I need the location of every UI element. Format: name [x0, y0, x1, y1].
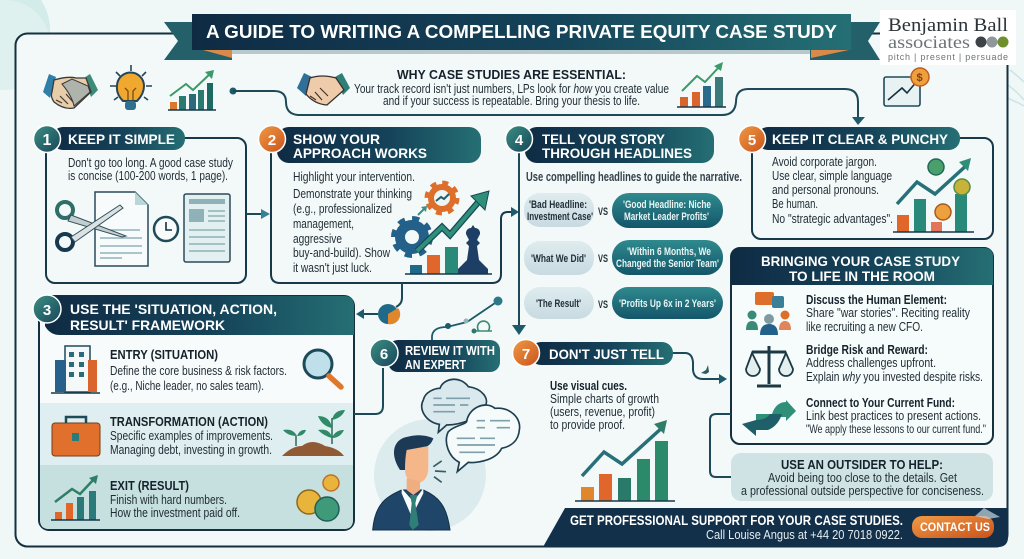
text block	[68, 155, 233, 183]
text block	[550, 378, 659, 432]
intro text: Use compelling headlines to guide the narrative.	[526, 169, 742, 184]
text block: management,	[293, 216, 354, 231]
headline comparison row 1: VS	[598, 206, 608, 218]
callout: use an outsider to help: USE AN OUTSIDER TO HELP:	[781, 457, 943, 472]
footer: call to action	[543, 508, 1008, 547]
headline comparison row 2	[524, 240, 723, 275]
number badge: 7	[522, 346, 530, 363]
footer text	[570, 512, 903, 542]
text block: Demonstrate your thinking	[293, 186, 412, 201]
heading pill	[52, 127, 185, 150]
headline comparison row 3: 'Profits Up 6x in 2 Years'	[619, 298, 716, 310]
title text: A GUIDE TO WRITING A COMPELLING PRIVATE EQUITY CASE STUDY	[206, 22, 837, 42]
headline comparison row 2: 'What We Did'	[531, 253, 586, 265]
panel 7: don't just tell	[512, 340, 727, 501]
heading: USE THE 'SITUATION, ACTION,	[70, 301, 277, 317]
title banner	[164, 14, 880, 60]
panel: bringing your case study to life in the room	[731, 248, 993, 444]
icon: scissors	[57, 202, 126, 250]
text block: buy-and-build). Show	[293, 245, 390, 260]
number badge	[512, 340, 540, 366]
row: entry: Define the core business & risk factors.	[110, 363, 287, 378]
heading pill	[530, 342, 673, 365]
headline comparison row 1: Investment Case'	[527, 211, 593, 223]
number badge: 3	[43, 302, 51, 319]
text block: and personal pronouns.	[772, 182, 879, 197]
item: connect to fund	[742, 395, 986, 436]
text block: aggressive	[293, 231, 342, 246]
row: transformation: Specific examples of improvements.	[110, 428, 273, 443]
headline comparison row 2: VS	[598, 253, 608, 265]
heading pill: TELL YOUR STORY	[542, 131, 666, 147]
heading pill: AN EXPERT	[405, 357, 466, 372]
item: connect to fund: Connect to Your Current Fund:	[806, 395, 955, 410]
icon: gears and growth	[394, 183, 492, 274]
panel 3: situation action result framework	[33, 295, 354, 530]
heading pill	[525, 127, 714, 163]
icon: chart	[677, 62, 726, 107]
text block: (users, revenue, profit)	[550, 404, 655, 419]
number badge	[738, 126, 766, 152]
headline comparison row 3: 'The Result'	[536, 298, 581, 310]
panel 6: review it with an expert	[370, 339, 520, 531]
text block: Simple charts of growth	[550, 391, 659, 406]
heading pill: KEEP IT SIMPLE	[68, 131, 175, 147]
section: why case studies are essential	[297, 62, 726, 108]
headline comparison row 3	[524, 287, 723, 319]
number badge: 5	[748, 132, 756, 149]
heading pill: KEEP IT CLEAR & PUNCHY	[772, 131, 949, 147]
logo: associates	[888, 32, 970, 52]
text block: to provide proof.	[550, 417, 625, 432]
icon: document	[95, 192, 148, 266]
text block: Highlight your intervention.	[293, 169, 415, 184]
number badge: 4	[515, 132, 524, 149]
heading: WHY CASE STUDIES ARE ESSENTIAL:	[397, 67, 626, 82]
item: risk and reward: Explain why you invested despite risks.	[806, 369, 983, 384]
number badge: 1	[43, 132, 52, 149]
arrow: step 1 to 2	[246, 209, 270, 219]
connector: step 2 to 3	[356, 283, 402, 324]
chart: growth bars	[575, 420, 675, 501]
connector: step 6 to panel 3	[354, 368, 383, 414]
panel 1: keep it simple	[34, 126, 246, 283]
number badge: 2	[268, 132, 276, 149]
row: exit: Finish with hard numbers.	[110, 492, 227, 507]
icon: handshake small	[297, 73, 350, 105]
row: exit: EXIT (RESULT)	[110, 478, 189, 493]
number badge	[506, 126, 532, 152]
text block: Your track record isn't just numbers, LPs look for how you create value	[354, 81, 669, 96]
headline comparison row 2: Changed the Senior Team'	[616, 258, 719, 270]
footer text: Call Louise Angus at +44 20 7018 0922.	[706, 527, 903, 542]
text block: Use clear, simple language	[772, 168, 892, 183]
text block: Use visual cues.	[550, 378, 627, 393]
number badge	[370, 339, 398, 367]
logo: pitch | present | persuade	[888, 52, 1008, 62]
number badge	[33, 295, 61, 323]
icon: chart with coins	[893, 158, 974, 232]
heading: BRINGING YOUR CASE STUDY	[761, 253, 961, 269]
item: human element: like recruiting a new CFO.	[806, 319, 923, 334]
headline comparison row 2: 'Within 6 Months, We	[627, 246, 711, 258]
footer text: GET PROFESSIONAL SUPPORT FOR YOUR CASE STUDIES.	[570, 512, 903, 528]
heading	[731, 248, 993, 285]
connector: step 6 path	[432, 296, 502, 340]
text line two: and if your success is repeatable. Bring your thesis to life.	[383, 93, 640, 108]
row: transformation: Managing debt, investing in growth.	[110, 442, 272, 457]
logo	[880, 10, 1016, 65]
icon: expert with speech bubbles	[373, 379, 520, 531]
text block: Avoid corporate jargon.	[772, 154, 877, 169]
icon: handshake	[43, 74, 98, 108]
heading pill: REVIEW IT WITH	[405, 343, 495, 358]
text block: is concise (100-200 words, 1 page).	[68, 168, 228, 183]
icon: document with coin: $	[916, 72, 923, 84]
callout: use an outsider to help	[731, 453, 993, 501]
item: risk and reward: Address challenges upfront.	[806, 355, 936, 370]
heading pill: APPROACH WORKS	[293, 145, 427, 161]
contact button: CONTACT US	[920, 520, 990, 534]
item: risk and reward: Bridge Risk and Reward:	[806, 342, 928, 357]
icon: clock	[154, 217, 178, 241]
text block: (e.g., professionalized	[293, 201, 392, 216]
row: entry: (e.g., Niche leader, no sales team).	[110, 378, 264, 393]
text block	[293, 169, 415, 275]
item: human element: Discuss the Human Element:	[806, 292, 947, 307]
text block: Be human.	[772, 196, 818, 211]
callout: use an outsider to help: Avoid being too close to the details. Get	[768, 470, 957, 485]
icon: growth chart	[168, 70, 216, 110]
row: exit: How the investment paid off.	[110, 505, 240, 520]
headline comparison row 1: 'Good Headline: Niche	[623, 199, 711, 211]
heading pill	[277, 127, 481, 163]
item: connect to fund: Link best practices to present actions.	[806, 408, 981, 423]
heading: TO LIFE IN THE ROOM	[789, 268, 935, 284]
text block: it wasn't just luck.	[293, 260, 372, 275]
headline comparison row 1	[524, 193, 723, 228]
headline comparison row 3: VS	[598, 299, 608, 311]
text block	[772, 154, 893, 226]
text block: Don't go too long. A good case study	[68, 155, 233, 170]
headline comparison row 1: 'Bad Headline:	[529, 199, 587, 211]
contact button	[912, 508, 1000, 538]
heading pill	[757, 127, 960, 150]
number badge	[34, 126, 60, 152]
number badge	[258, 126, 286, 152]
connector: why section	[230, 88, 865, 125]
item: human element	[746, 292, 970, 335]
icon: one-page report	[184, 194, 230, 262]
number badge: 6	[380, 346, 388, 363]
panel 5: keep it clear and punchy	[738, 126, 993, 239]
item: human element: Share "war stories". Reciting reality	[806, 305, 970, 320]
row: entry: ENTRY (SITUATION)	[110, 347, 218, 362]
row: transformation: TRANSFORMATION (ACTION)	[110, 414, 268, 429]
heading	[45, 296, 354, 335]
row: exit	[51, 475, 339, 521]
icon: light bulb	[110, 65, 152, 110]
heading pill	[388, 340, 500, 372]
arrow to room panel	[673, 353, 727, 384]
headline comparison row 1: Market Leader Profits'	[624, 211, 709, 223]
panel 4: tell your story through headlines	[506, 126, 742, 335]
heading pill: THROUGH HEADLINES	[542, 145, 692, 161]
logo: Benjamin Ball	[888, 15, 1008, 36]
item: risk and reward	[746, 342, 983, 386]
heading pill: SHOW YOUR	[293, 131, 380, 147]
panel 2: show your approach works	[258, 126, 519, 283]
connector: room panel to outsider	[710, 414, 731, 477]
row: entry	[51, 346, 341, 393]
heading pill: DON'T JUST TELL	[549, 346, 664, 362]
text block: No "strategic advantages".	[772, 211, 893, 226]
heading: RESULT' FRAMEWORK	[70, 317, 225, 333]
icon: document with coin	[884, 68, 929, 106]
row: transformation	[52, 410, 345, 457]
